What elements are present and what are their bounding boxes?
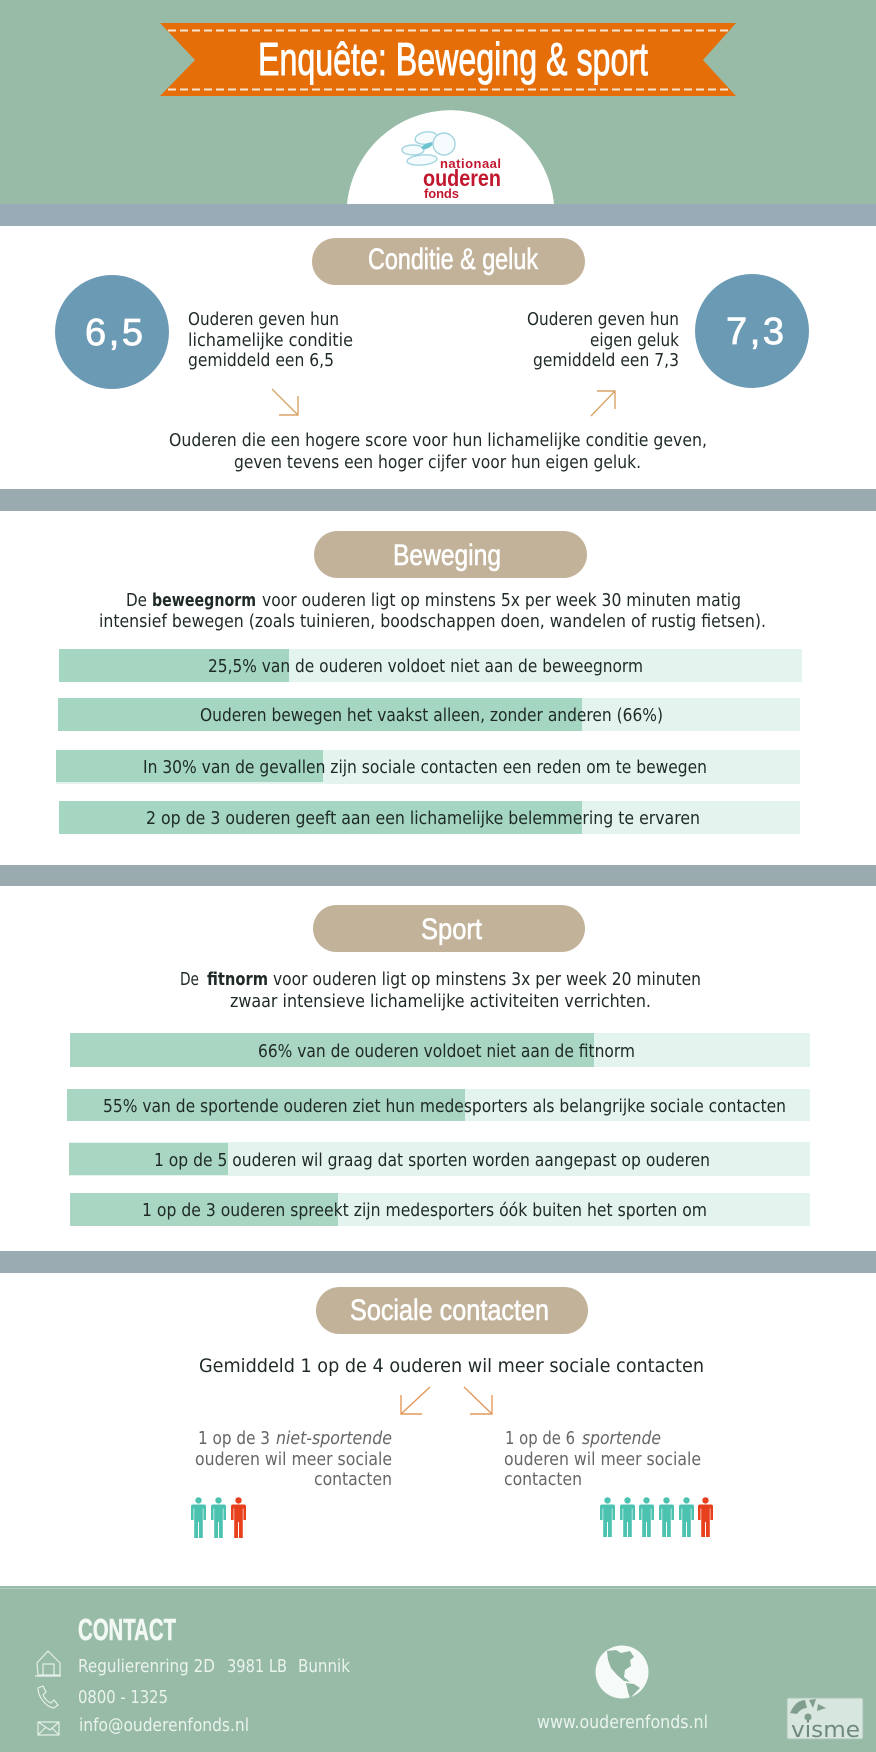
text: conditie score (188, 309, 353, 371)
panel: conditie en geluk (55, 238, 809, 473)
text: beweegnorm: De (126, 590, 147, 611)
bar: 2 op de 3: 2 op de 3 ouderen geeft aan een lichamelijke belemmering te ervaren (146, 808, 700, 829)
bar: 25,5% (59, 649, 802, 682)
heading: conditie en geluk (312, 238, 585, 285)
header background (0, 0, 876, 204)
title ribbon (160, 23, 736, 96)
icon: mail (38, 1722, 59, 1735)
icon: globe (596, 1646, 648, 1698)
bar: 1 op de 3: 1 op de 3 ouderen spreekt zijn medesporters óók buiten het sporten om (142, 1200, 707, 1221)
arrow: down left (401, 1387, 430, 1414)
bar: 66% (58, 698, 800, 731)
text: niet-sportende: ouderen wil meer sociale (195, 1449, 392, 1470)
panel: sociale contacten (191, 1287, 713, 1538)
text: conditie score: gemiddeld een 6,5 (188, 350, 334, 371)
bar: 25,5%: 25,5% van de ouderen voldoet niet aan de beweegnorm (208, 656, 643, 677)
bar: 66%: Ouderen bewegen het vaakst alleen, zonder anderen (66%) (200, 705, 663, 726)
panel: beweging (56, 531, 802, 834)
email: info@ouderenfonds.nl (79, 1715, 249, 1736)
bar: 30% (56, 750, 800, 784)
heading: sport: Sport (421, 913, 483, 946)
conclusion text (169, 430, 707, 473)
score circle 7,3: 7,3 (726, 311, 784, 353)
logo: visme: visme (791, 1718, 860, 1743)
text: niet-sportende: niet-sportende (276, 1428, 392, 1449)
text: geluk score (527, 309, 679, 371)
address: 3981 LB (227, 1656, 287, 1677)
arrow: down right (464, 1387, 492, 1414)
statement: Gemiddeld 1 op de 4 ouderen wil meer sociale contacten (199, 1355, 704, 1377)
text: fitnorm (180, 969, 701, 1012)
icon: house (35, 1651, 61, 1676)
bar: 66% (70, 1033, 810, 1067)
heading: conditie en geluk: Conditie & geluk (368, 243, 539, 276)
text: sportende (504, 1428, 701, 1490)
bar: 55% (67, 1089, 810, 1121)
bar: 30%: In 30% van de gevallen zijn sociale contacten een reden om te bewegen (143, 757, 707, 778)
panel: footer contact (0, 1586, 876, 1752)
address: Regulierenring 2D (78, 1656, 215, 1677)
logo arch: ouderen (423, 165, 501, 191)
icons: people 1 of 6 (600, 1497, 713, 1537)
title: Enquête: Beweging & sport (258, 33, 648, 85)
heading: beweging (314, 531, 587, 578)
text: niet-sportende: 1 op de 3 (198, 1428, 270, 1449)
bar: 1 op de 3 (70, 1193, 810, 1226)
bar: 55%: 55% van de sportende ouderen ziet hun medesporters als belangrijke sociale contacten (103, 1096, 786, 1117)
text: beweegnorm: voor ouderen ligt op minstens 5x per week 30 minuten matig (262, 590, 741, 611)
heading: beweging: Beweging (393, 539, 501, 572)
text: sportende: contacten (504, 1469, 582, 1490)
logo arch (347, 110, 554, 204)
text: geluk score: Ouderen geven hun (527, 309, 679, 330)
text: fitnorm: fitnorm (207, 969, 268, 990)
bar: 1 op de 5: 1 op de 5 ouderen wil graag dat sporten worden aangepast op ouderen (154, 1150, 710, 1171)
address (78, 1656, 350, 1677)
panel: sport (67, 905, 810, 1226)
heading: sociale contacten: Sociale contacten (350, 1294, 549, 1327)
phone number: 0800 - 1325 (78, 1687, 168, 1708)
score circle 6,5: 6,5 (85, 312, 143, 354)
logo: visme (787, 1698, 863, 1743)
text: fitnorm: De (180, 969, 199, 990)
score circle 7,3 (695, 274, 809, 388)
icon: phone (38, 1686, 58, 1708)
text: niet-sportende (195, 1428, 392, 1490)
text: sportende: sportende (582, 1428, 661, 1449)
bar: 2 op de 3 (59, 801, 800, 834)
address: Bunnik (298, 1656, 350, 1677)
text: sportende: 1 op de 6 (505, 1428, 575, 1449)
text: niet-sportende: contacten (314, 1469, 392, 1490)
heading: sociale contacten (316, 1287, 588, 1334)
text: beweegnorm (99, 590, 766, 632)
score circle 6,5 (55, 275, 169, 389)
text: beweegnorm: intensief bewegen (zoals tuinieren, boodschappen doen, wandelen of rustig fietsen). (99, 611, 766, 632)
conclusion text: Ouderen die een hogere score voor hun lichamelijke conditie geven, (169, 430, 707, 451)
logo text: nationaal (440, 156, 501, 171)
text: fitnorm: zwaar intensieve lichamelijke activiteiten verrichten. (230, 991, 651, 1012)
text: conditie score: lichamelijke conditie (188, 330, 353, 351)
text: sportende: ouderen wil meer sociale (504, 1449, 701, 1470)
heading: contact: CONTACT (78, 1612, 176, 1647)
bar: 66%: 66% van de ouderen voldoet niet aan de fitnorm (258, 1041, 635, 1062)
text: beweegnorm: beweegnorm (152, 590, 256, 611)
conclusion text: geven tevens een hoger cijfer voor hun eigen geluk. (234, 452, 641, 473)
website: www.ouderenfonds.nl (537, 1712, 708, 1733)
icons: people 1 of 3 (191, 1497, 246, 1538)
arrow: down right (272, 389, 298, 415)
heading: sport (313, 905, 585, 952)
icon: flower logo (402, 130, 455, 166)
text: geluk score: gemiddeld een 7,3 (533, 350, 679, 371)
bar: 1 op de 5 (69, 1142, 810, 1176)
text: fitnorm: voor ouderen ligt op minstens 3x per week 20 minuten (273, 969, 701, 990)
text: geluk score: eigen geluk (590, 330, 679, 351)
logo arch: fonds (424, 186, 459, 201)
arrow: up right (591, 391, 615, 416)
text: conditie score: Ouderen geven hun (188, 309, 339, 330)
